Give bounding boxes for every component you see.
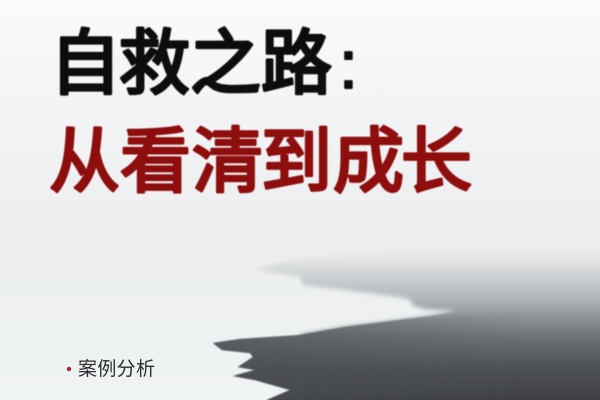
bullet dot [67, 367, 71, 371]
bullet label: case analysis [67, 358, 155, 380]
landscape: misty shore with dark water [213, 240, 600, 400]
title colon: : [339, 27, 358, 103]
label text: 案例分析 [78, 358, 155, 380]
title line 1: 自救之路 [50, 7, 332, 109]
title line 2: 从看清到成长 [49, 105, 472, 207]
